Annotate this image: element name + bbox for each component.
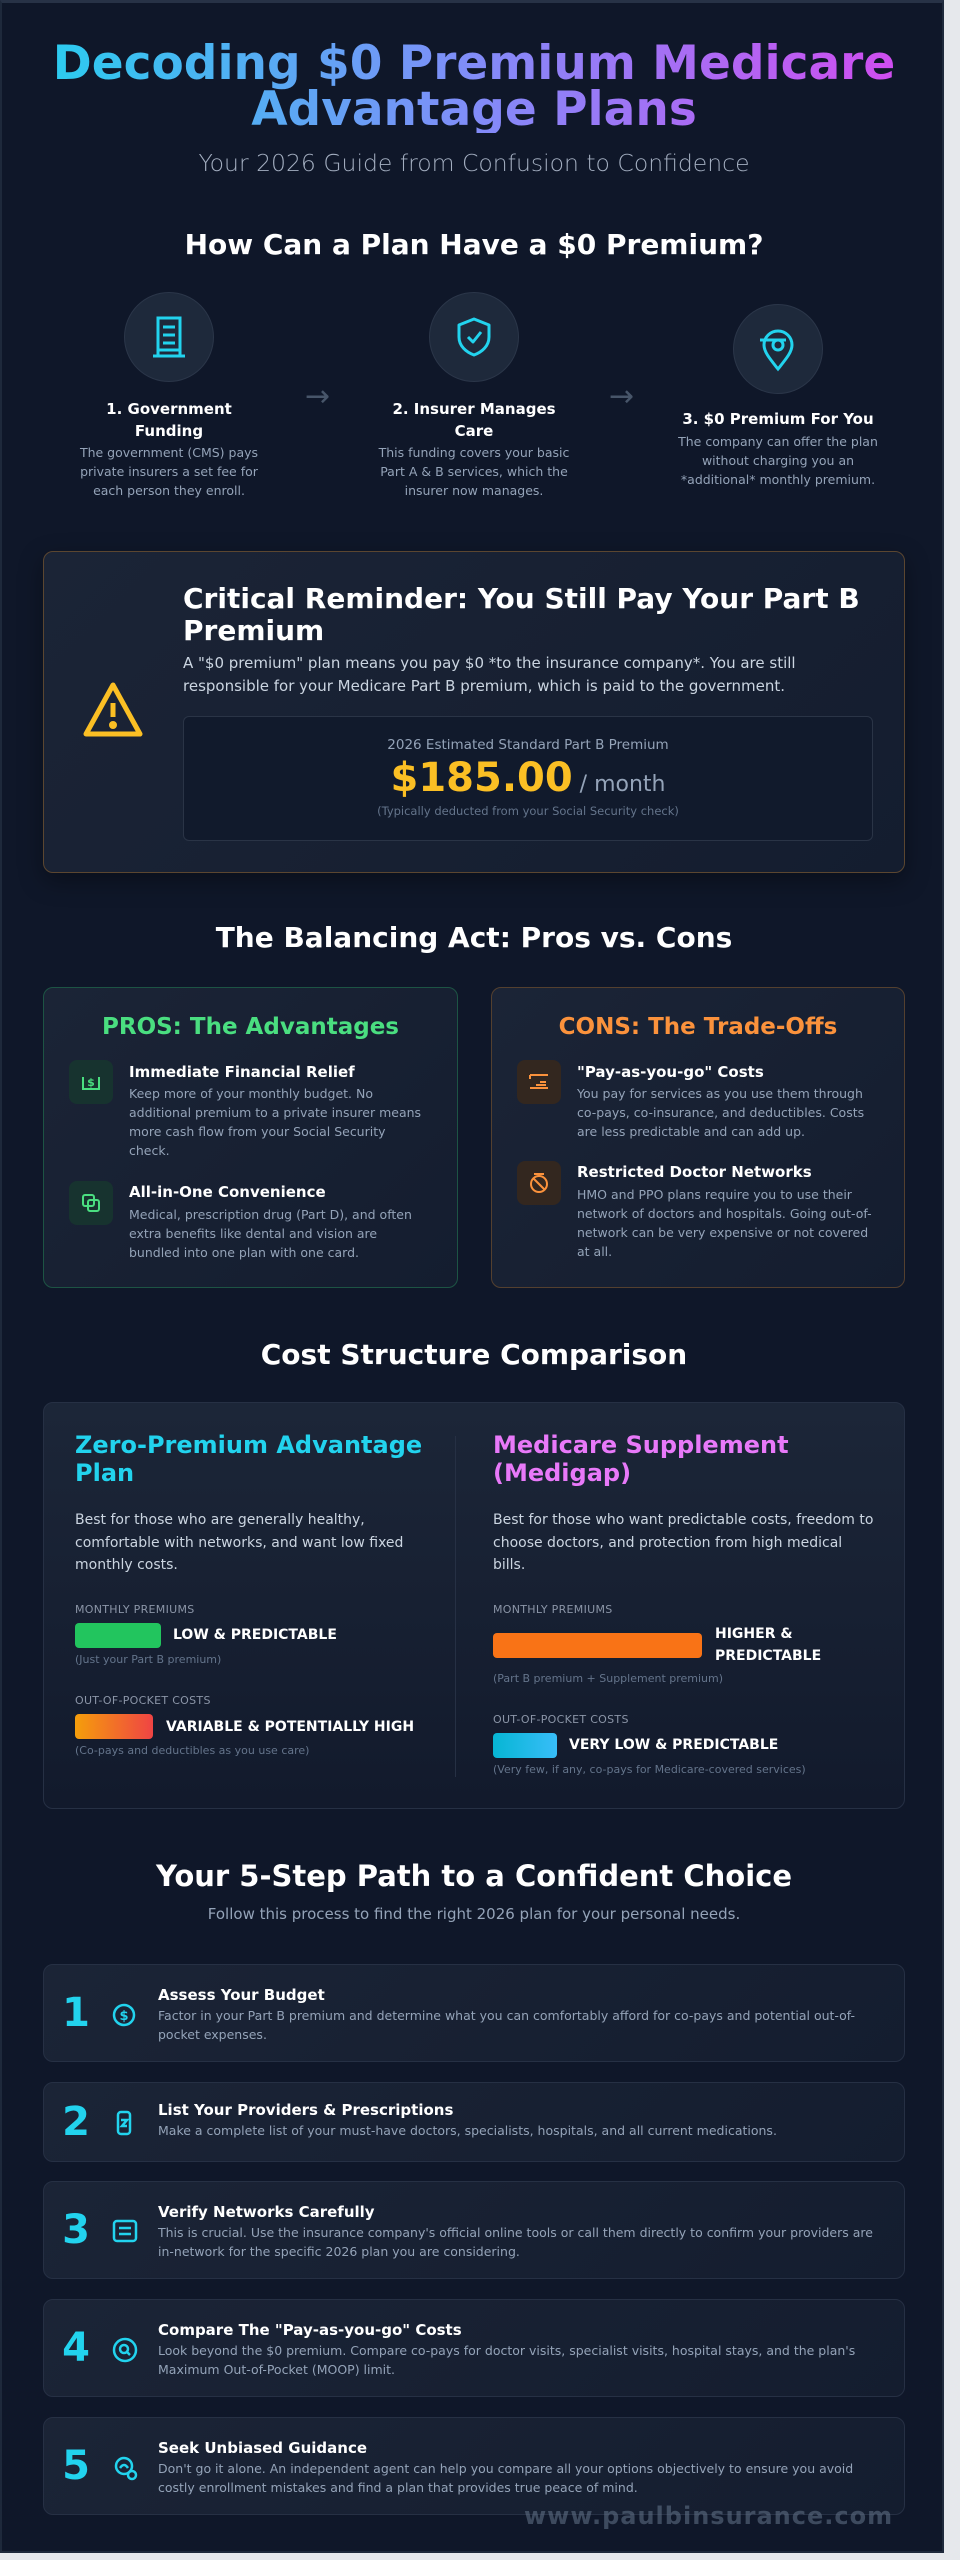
con item 2: HMO and PPO plans require you to use their network of doctors and hospitals. Going out-of-network can be very expensive or not covered at all.: [577, 1187, 872, 1259]
step card 5: Seek Unbiased Guidance: [158, 2439, 367, 2457]
icon: agent: [114, 2456, 138, 2480]
step 2: This funding covers your basic Part A & B services, which the insurer now manages.: [379, 445, 569, 498]
step 3: [678, 304, 878, 487]
step card 1: Factor in your Part B premium and determine what you can comfortably afford for co-pays and potential out-of-pocket expenses.: [158, 2008, 855, 2042]
reminder heading: Critical Reminder: You Still Pay Your Part B Premium: [183, 582, 860, 647]
column: medigap: OUT-OF-POCKET COSTS: [493, 1713, 629, 1726]
icon: building: [124, 292, 214, 382]
step card 5: Don't go it alone. An independent agent can help you compare all your options objectively to ensure you avoid costly enrollment mistakes and find a plan that provides true peace of mind.: [158, 2461, 853, 2495]
price box: (Typically deducted from your Social Security check): [377, 804, 679, 818]
column: medigap: (Very few, if any, co-pays for Medicare-covered services): [493, 1763, 806, 1776]
column: medigap: PREDICTABLE: [715, 1648, 821, 1664]
bar: higher premiums: [493, 1633, 702, 1658]
reminder text: A "$0 premium" plan means you pay $0 *to the insurance company*. You are still responsible for your Medicare Part B premium, which is paid to the government.: [183, 654, 796, 695]
title: Advantage Plans: [251, 82, 697, 137]
column: zero-premium: MONTHLY PREMIUMS: [75, 1603, 195, 1616]
step card 2: [43, 2082, 905, 2162]
icon: warning: [84, 682, 142, 736]
column: zero-premium: (Just your Part B premium): [75, 1653, 221, 1666]
panel: pros: [43, 987, 458, 1288]
subtitle: Your 2026 Guide from Confusion to Confidence: [198, 149, 750, 177]
arrow 2: →: [609, 379, 634, 414]
panel: cons: [491, 987, 905, 1288]
column: medigap: HIGHER &: [715, 1626, 793, 1642]
step card 2: Make a complete list of your must-have doctors, specialists, hospitals, and all current medications.: [158, 2123, 777, 2138]
step 3: The company can offer the plan without charging you an *additional* monthly premium.: [678, 434, 878, 487]
step card 2: List Your Providers & Prescriptions: [158, 2101, 453, 2119]
column: zero-premium: Zero-Premium Advantage Plan: [75, 1431, 422, 1487]
pro item 1: Immediate Financial Relief: [129, 1063, 355, 1081]
step 1: The government (CMS) pays private insurers a set fee for each person they enroll.: [80, 445, 258, 498]
panel: critical reminder: [43, 551, 905, 873]
con item 2: Restricted Doctor Networks: [577, 1163, 812, 1181]
pro item 2: [69, 1181, 412, 1260]
watermark: www.paulbinsurance.com: [524, 2502, 893, 2530]
price box: 2026 Estimated Standard Part B Premium: [387, 737, 669, 753]
pro item 2: All-in-One Convenience: [129, 1183, 326, 1201]
step card 4: [43, 2299, 905, 2397]
heading: pros vs cons: The Balancing Act: Pros vs. Cons: [216, 921, 732, 954]
subheading: Follow this process to find the right 2026 plan for your personal needs.: [208, 1905, 740, 1923]
bar: variable oop: [75, 1714, 153, 1739]
icon: dollar: [112, 2004, 136, 2026]
icon: prescription: [116, 2110, 132, 2136]
step 2: [378, 292, 569, 498]
column: medigap: [493, 1431, 873, 1776]
step 1: 1. Government: [106, 400, 232, 418]
column: zero-premium: VARIABLE & POTENTIALLY HIGH: [166, 1719, 414, 1735]
step card 2: 2: [62, 2099, 90, 2145]
con item 2: [517, 1161, 872, 1259]
heading: how can a plan: How Can a Plan Have a $0 Premium?: [185, 228, 763, 261]
step card 1: 1: [62, 1990, 90, 2036]
step card 4: 4: [62, 2325, 90, 2371]
step card 1: Assess Your Budget: [158, 1986, 325, 2004]
step 1: Funding: [135, 422, 203, 440]
con item 1: [517, 1060, 864, 1139]
title: Decoding $0 Premium Medicare: [53, 36, 895, 91]
bar: very low oop: [493, 1733, 557, 1758]
step card 3: Verify Networks Carefully: [158, 2203, 375, 2221]
step card 4: Compare The "Pay-as-you-go" Costs: [158, 2321, 462, 2339]
step card 1: [43, 1964, 905, 2062]
step 2: 2. Insurer Manages: [392, 400, 556, 418]
panel: cost comparison: [43, 1402, 905, 1809]
pro item 1: $: [87, 1076, 95, 1089]
column: medigap: MONTHLY PREMIUMS: [493, 1603, 613, 1616]
panel: cons: CONS: The Trade-Offs: [559, 1014, 837, 1040]
step card 3: This is crucial. Use the insurance company's official online tools or call them directly to confirm your providers are in-network for the specific 2026 plan you are considering.: [158, 2225, 873, 2259]
pro item 1: [69, 1060, 421, 1158]
step 3: 3. $0 Premium For You: [682, 410, 874, 428]
column: zero-premium: [75, 1431, 422, 1757]
icon: list: [112, 2220, 138, 2242]
column: zero-premium: LOW & PREDICTABLE: [173, 1627, 337, 1643]
icon: location: [733, 304, 823, 394]
step card 4: Look beyond the $0 premium. Compare co-pays for doctor visits, specialist visits, hospital stays, and the plan's Maximum Out-of-Pocket (MOOP) limit.: [158, 2343, 855, 2377]
icon: dollar: $: [119, 2009, 129, 2024]
step card 3: 3: [62, 2207, 90, 2253]
pro item 2: Medical, prescription drug (Part D), and often extra benefits like dental and vision are bundled into one plan with one card.: [129, 1207, 412, 1260]
column: medigap: (Part B premium + Supplement premium): [493, 1672, 723, 1685]
price box: $185.00 / month: [390, 755, 666, 801]
price box: [183, 716, 873, 841]
column: medigap: Medicare Supplement (Medigap): [493, 1431, 789, 1487]
pro item 1: Keep more of your monthly budget. No additional premium to a private insurer means more cash flow from your Social Security check.: [129, 1086, 421, 1158]
column: medigap: VERY LOW & PREDICTABLE: [569, 1737, 778, 1753]
step card 3: [43, 2181, 905, 2279]
step 1: [80, 292, 258, 498]
con item 1: "Pay-as-you-go" Costs: [577, 1063, 764, 1081]
heading: cost structure: Cost Structure Comparison: [261, 1338, 687, 1371]
heading: 5-step path: Your 5-Step Path to a Confident Choice: [156, 1859, 792, 1893]
step card 5: 5: [62, 2443, 90, 2489]
icon: shield: [429, 292, 519, 382]
arrow 1: →: [305, 379, 330, 414]
column: zero-premium: OUT-OF-POCKET COSTS: [75, 1694, 211, 1707]
icon: search: [112, 2338, 138, 2362]
column: zero-premium: Best for those who are generally healthy, comfortable with networks, and want low fixed monthly costs.: [75, 1512, 403, 1573]
title: [2, 41, 946, 133]
con item 1: You pay for services as you use them through co-pays, co-insurance, and deductibles. Costs are less predictable and can add up.: [577, 1086, 864, 1139]
column: zero-premium: (Co-pays and deductibles as you use care): [75, 1744, 309, 1757]
bar: low premiums: [75, 1623, 161, 1648]
step 2: Care: [455, 422, 493, 440]
step card 5: [43, 2417, 905, 2515]
panel: pros: PROS: The Advantages: [102, 1014, 399, 1040]
column: medigap: Best for those who want predictable costs, freedom to choose doctors, and protection from high medical bills.: [493, 1512, 873, 1573]
